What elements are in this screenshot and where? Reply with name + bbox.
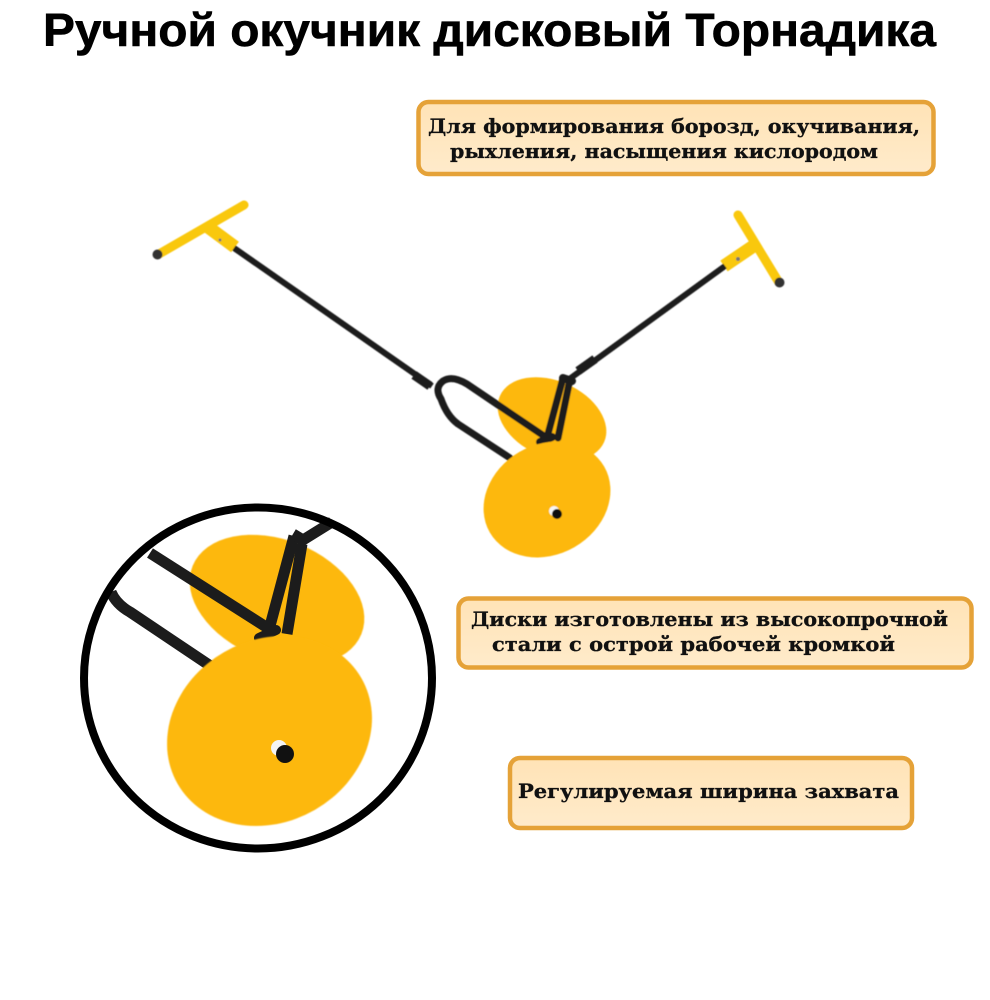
front disc [462, 419, 632, 580]
left shaft and loop frame [234, 248, 547, 458]
product illustration: disc hiller [152, 205, 784, 580]
detail: front disc [132, 599, 407, 863]
title: Ручной окучник дисковый Торнадика [43, 4, 936, 56]
left T-handle [152, 205, 244, 260]
callout: purpose: Для формирования борозд, окучивания, [428, 115, 920, 138]
callout: purpose [418, 102, 934, 174]
detail: hub [271, 740, 294, 763]
callout: working width [510, 758, 912, 828]
callout: discs: Диски изготовлены из высокопрочной [471, 608, 948, 631]
detail: black ring [84, 508, 432, 848]
detail: back disc [170, 510, 384, 690]
callout: purpose: рыхления, насыщения кислородом [450, 140, 878, 163]
right T-handle [724, 215, 784, 288]
callout: discs [458, 598, 972, 668]
right shaft and fork [540, 266, 725, 442]
callout: discs: стали с острой рабочей кромкой [492, 633, 895, 656]
detail: frame bars [111, 522, 332, 667]
zoomed detail circle [84, 508, 432, 863]
back disc [484, 361, 620, 477]
front disc hub [549, 506, 562, 519]
callout: working width: Регулируемая ширина захвата [518, 780, 899, 803]
